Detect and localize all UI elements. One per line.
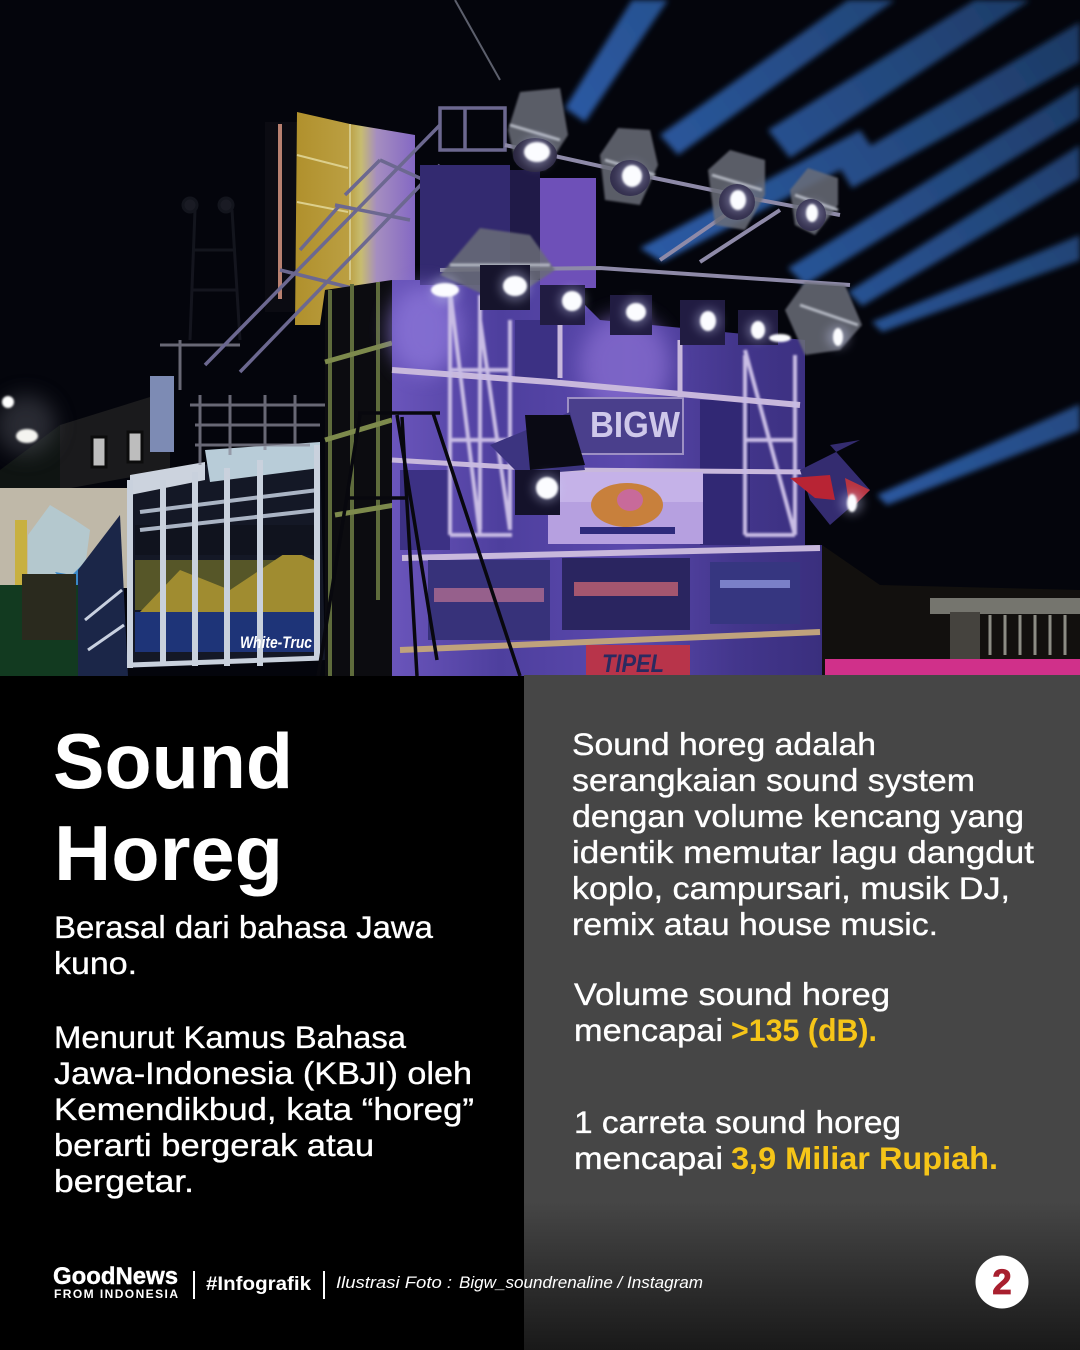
overhead truss with lights [440, 145, 850, 285]
text block: dictionary meaning: Jawa-Indonesia (KBJI) oleh [54, 1055, 472, 1091]
title: Horeg [54, 809, 283, 897]
text block: volume [574, 976, 890, 1048]
text block: definition: serangkaian sound system [572, 762, 975, 798]
text block: dictionary meaning [54, 1019, 474, 1199]
panel: right grey [524, 675, 1080, 1350]
purple speaker wall [390, 165, 822, 676]
title: Sound [53, 717, 293, 805]
lower banners: TIPEL [602, 650, 664, 678]
text block: volume: mencapai [574, 1012, 723, 1048]
scaffold tangled behind truck [160, 340, 325, 465]
text block: price: 1 carreta sound horeg [574, 1104, 901, 1140]
truck with decorated box [78, 442, 325, 676]
text block: origin: kuno. [54, 945, 137, 981]
building on the left [0, 397, 170, 676]
horizontal bright frame bars [392, 320, 820, 650]
plastic-covered spotlights [440, 88, 870, 525]
text block: dictionary meaning: Menurut Kamus Bahasa [54, 1019, 406, 1055]
text block: volume: >135 (dB). [731, 1012, 877, 1048]
black side speaker column [325, 280, 395, 676]
thin antenna line [455, 0, 500, 80]
photo credit: Bigw_soundrenaline / Instagram [459, 1274, 703, 1292]
photo: sound system stage at night [0, 0, 1080, 678]
text block: price: mencapai [574, 1140, 723, 1176]
text block: dictionary meaning: berarti bergerak atau [54, 1127, 374, 1163]
white lattice truss towers [450, 290, 795, 535]
text block: definition: remix atau house music. [572, 906, 938, 942]
footer hashtag: #Infografik [206, 1274, 311, 1295]
BIGW sign: BIGW [590, 404, 680, 445]
text block: price: 3,9 Miliar Rupiah. [731, 1140, 998, 1176]
right background house [822, 545, 1080, 676]
text block: origin: Berasal dari bahasa Jawa [54, 909, 433, 945]
text block: price [574, 1104, 998, 1176]
photo credit [336, 1274, 703, 1292]
BIGW sign [568, 398, 683, 454]
text block: dictionary meaning: Kemendikbud, kata “horeg” [54, 1091, 474, 1127]
footer logo: FROM INDONESIA [54, 1287, 178, 1301]
panel: left black [0, 676, 524, 1350]
truck with decorated box: White-Truc [240, 633, 312, 652]
black ladder [318, 413, 520, 676]
text block: definition: identik memutar lagu dangdut [572, 834, 1034, 870]
text block: definition: Sound horeg adalah [572, 726, 876, 762]
spotlight glows [431, 137, 863, 514]
radio tower [183, 198, 240, 340]
text block: definition: dengan volume kencang yang [572, 798, 1024, 834]
page number badge: 2 [992, 1263, 1012, 1302]
lower banners [428, 558, 800, 678]
yellow speaker tower [265, 112, 415, 325]
footer logo: GoodNews [53, 1263, 178, 1290]
diagonal truss [205, 108, 505, 372]
text block: origin [54, 909, 433, 981]
spotlight lamps [431, 142, 857, 512]
text block: definition: koplo, campursari, musik DJ, [572, 870, 1010, 906]
text block: dictionary meaning: bergetar. [54, 1163, 194, 1199]
text block: volume: Volume sound horeg [574, 976, 890, 1012]
title [53, 717, 293, 897]
page number badge [976, 1256, 1028, 1308]
photo credit: Ilustrasi Foto : [336, 1274, 452, 1292]
footer hashtag [193, 1271, 325, 1299]
street lamps [0, 395, 56, 455]
center banner with emblem [548, 472, 703, 544]
light beams in the sky [565, 0, 1080, 505]
text block: definition [572, 726, 1034, 942]
